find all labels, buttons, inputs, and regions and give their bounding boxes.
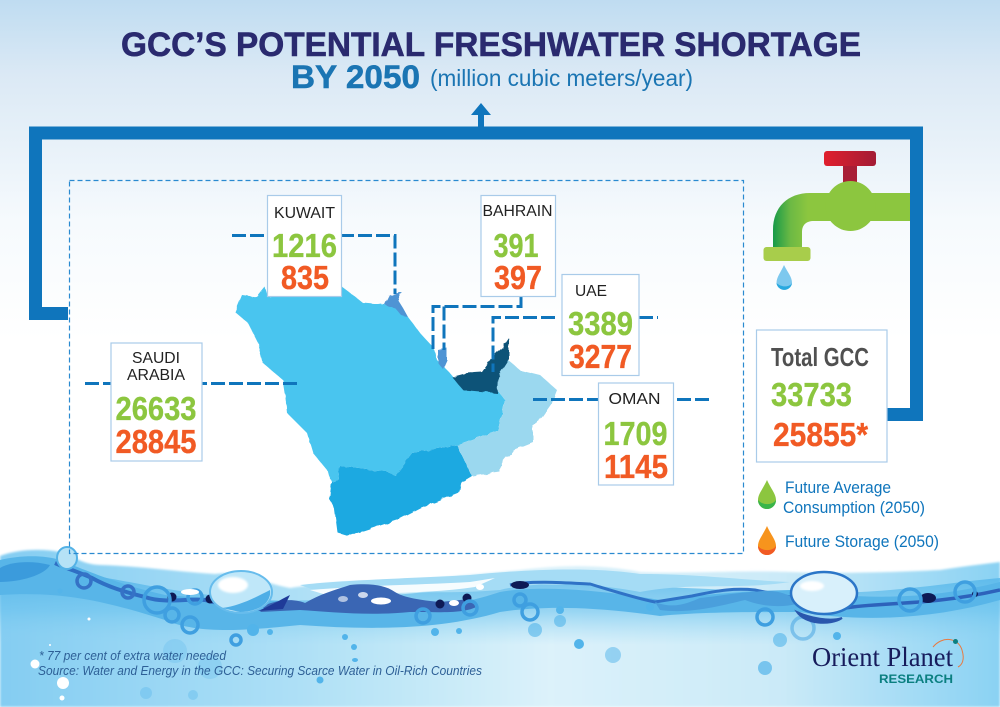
legend: future average consumption: Consumption (2050)	[783, 498, 925, 517]
callout: Oman: OMAN	[608, 391, 660, 408]
connector dashes	[85, 236, 712, 400]
callout: Oman: 1145	[604, 448, 668, 485]
subtitle: (million cubic meters/year)	[430, 65, 693, 91]
legend: future average consumption	[758, 478, 925, 517]
callout: Saudi Arabia: 28845	[116, 423, 196, 460]
map: Qatar	[438, 348, 447, 369]
background sky gradient	[0, 0, 1000, 340]
callout: Bahrain: 397	[494, 259, 542, 296]
callout: Saudi Arabia	[111, 343, 202, 461]
callout: UAE: 3389	[568, 305, 633, 342]
callout: Kuwait: 1216	[272, 227, 337, 264]
callout: Saudi Arabia: 26633	[116, 390, 196, 427]
blue frame pipe	[36, 133, 916, 414]
legend: future storage: Future Storage (2050)	[785, 532, 939, 551]
panel: Total GCC: Total GCC	[771, 342, 869, 372]
subtitle	[291, 59, 693, 95]
footnote and source: Source: Water and Energy in the GCC: Securing Scarce Water in Oil-Rich Countries	[38, 664, 482, 678]
callout: UAE	[562, 274, 639, 376]
map: Kuwait	[385, 292, 408, 317]
callout: Kuwait	[268, 196, 342, 296]
callout: Bahrain: BAHRAIN	[482, 203, 552, 220]
callout: UAE: UAE	[575, 283, 607, 300]
callout: Saudi Arabia: SAUDI	[132, 350, 180, 367]
callout: Saudi Arabia: ARABIA	[127, 367, 185, 384]
callout: Bahrain: 391	[494, 227, 538, 264]
map: UAE	[452, 338, 509, 393]
dashed map frame	[70, 180, 744, 554]
callout: Kuwait: KUWAIT	[274, 205, 335, 222]
water band illustration	[0, 547, 1000, 707]
map: Saudi Arabia	[235, 286, 505, 482]
legend: future average consumption: Future Average	[785, 478, 891, 497]
callout: Oman	[598, 383, 674, 485]
subtitle: BY 2050	[291, 59, 420, 95]
callout: UAE: 3277	[569, 338, 632, 375]
title: GCC’S POTENTIAL FRESHWATER SHORTAGE	[121, 26, 861, 64]
map: GCC countries	[235, 286, 557, 536]
arrow: up to title	[471, 103, 491, 127]
logo: Orient Planet Research: Orient Planet	[812, 642, 953, 672]
panel: Total GCC	[756, 330, 887, 462]
callout: Bahrain	[481, 196, 556, 296]
footnote and source: * 77 per cent of extra water needed	[39, 649, 227, 663]
icon: water tap	[764, 151, 910, 290]
legend: future storage	[758, 526, 939, 555]
callout: Oman: 1709	[604, 415, 668, 452]
footnote and source	[38, 649, 482, 678]
panel: Total GCC: 25855*	[773, 416, 868, 453]
logo: Orient Planet Research	[812, 639, 963, 686]
callout: Kuwait: 835	[281, 259, 329, 296]
map: Yemen region	[330, 445, 472, 536]
map: Oman	[457, 360, 557, 476]
panel: Total GCC: 33733	[771, 376, 852, 413]
logo: Orient Planet Research: RESEARCH	[879, 674, 953, 686]
